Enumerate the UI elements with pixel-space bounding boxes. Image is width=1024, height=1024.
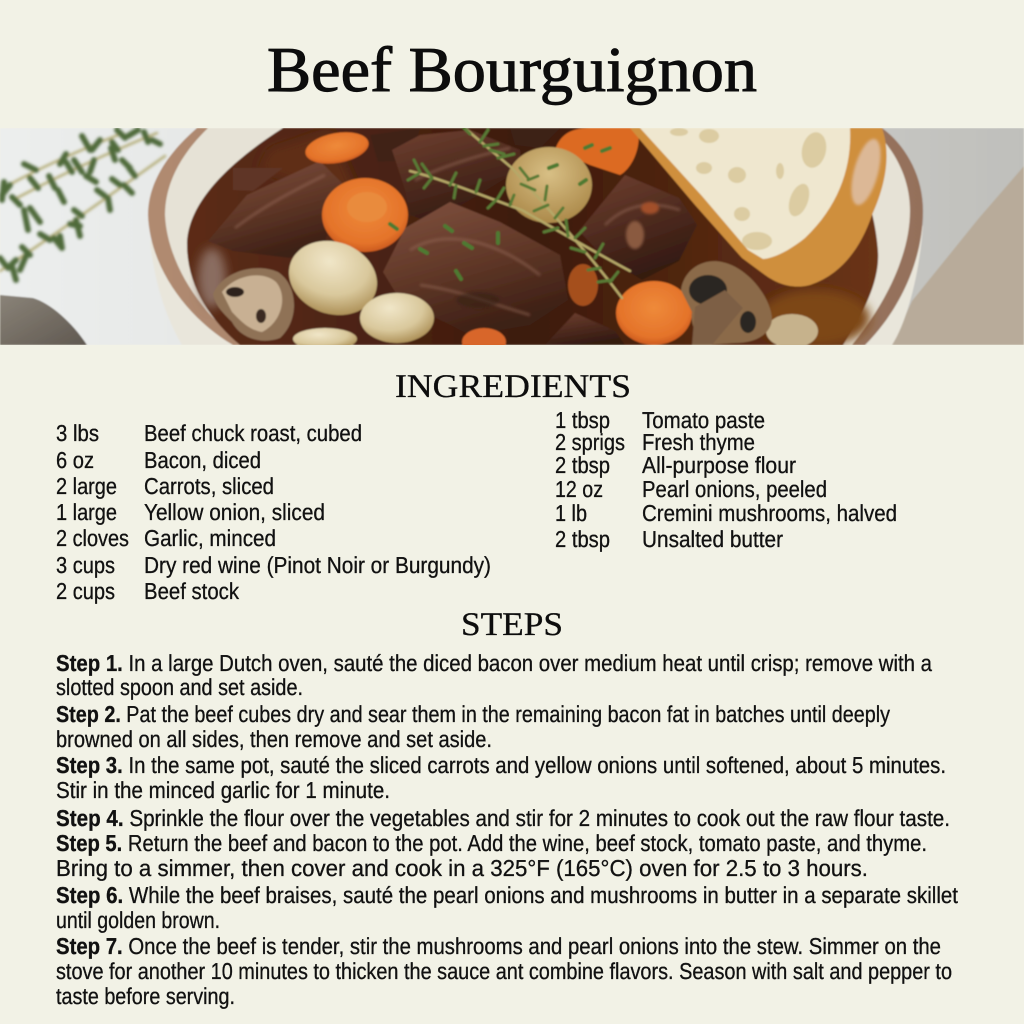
icon: spoon bbox=[0, 295, 87, 345]
ingredients list: left column: 1 large bbox=[56, 499, 117, 525]
ingredients list: left column: 6 oz bbox=[56, 447, 94, 473]
steps text block: Step 1. In a large Dutch oven, sauté the diced bacon over medium heat until crisp; remove with a bbox=[56, 650, 932, 676]
icon: linen napkin bbox=[892, 166, 1024, 345]
icon: bread slice bbox=[630, 128, 887, 287]
mushrooms bbox=[213, 261, 772, 345]
ingredients list: left column: Dry red wine (Pinot Noir or Burgundy) bbox=[144, 552, 491, 578]
title: Beef Bourguignon bbox=[267, 34, 757, 105]
steps text block: browned on all sides, then remove and set aside. bbox=[56, 726, 492, 752]
ingredients list: right column: Tomato paste bbox=[642, 407, 765, 433]
ingredients list: left column: 2 cloves bbox=[56, 525, 129, 551]
icon: thyme sprigs left bbox=[0, 130, 165, 280]
ingredients list: right column: 12 oz bbox=[555, 476, 603, 502]
ingredients list: right column: Unsalted butter bbox=[642, 526, 783, 552]
beef chunks bbox=[208, 128, 697, 345]
steps text block: until golden brown. bbox=[56, 907, 220, 933]
ingredients list: left column: 3 cups bbox=[56, 552, 115, 578]
ingredients list: right column: Fresh thyme bbox=[642, 429, 755, 455]
steps text block: Step 2. Pat the beef cubes dry and sear them in the remaining bacon fat in batches until deeply bbox=[56, 701, 890, 727]
steps text block: slotted spoon and set aside. bbox=[56, 674, 303, 700]
ingredients list: right column: 1 tbsp bbox=[555, 407, 610, 433]
ingredients list: left column: 3 lbs bbox=[56, 420, 99, 446]
steps text block bbox=[56, 650, 959, 1009]
steps text block: Step 3. In the same pot, sauté the sliced carrots and yellow onions until softened, about 5 minutes. bbox=[56, 752, 946, 778]
ingredients heading: INGREDIENTS bbox=[395, 369, 631, 405]
ingredients list: left column: 2 large bbox=[56, 473, 117, 499]
steps text block: Bring to a simmer, then cover and cook in a 325°F (165°C) oven for 2.5 to 3 hours. bbox=[56, 855, 868, 881]
ingredients list: right column: Cremini mushrooms, halved bbox=[642, 500, 897, 526]
ingredients list: right column: 2 tbsp bbox=[555, 526, 610, 552]
ingredients list: left column: Yellow onion, sliced bbox=[144, 499, 325, 525]
ingredients list: right column bbox=[555, 407, 897, 552]
pearl onions bbox=[278, 147, 818, 350]
ingredients list: left column: Beef stock bbox=[144, 578, 239, 604]
ingredients list: left column: Carrots, sliced bbox=[144, 473, 274, 499]
ingredients list: left column bbox=[56, 420, 491, 604]
photo: bowl of beef bourguignon with bread and thyme bbox=[0, 128, 1024, 356]
steps text block: Step 5. Return the beef and bacon to the pot. Add the wine, beef stock, tomato paste, and thyme. bbox=[56, 830, 927, 856]
steps heading: STEPS bbox=[461, 607, 563, 643]
ingredients list: right column: Pearl onions, peeled bbox=[642, 476, 827, 502]
icon: bowl bbox=[148, 128, 923, 346]
steps text block: taste before serving. bbox=[56, 983, 235, 1009]
ingredients list: left column: Beef chuck roast, cubed bbox=[144, 420, 362, 446]
steps text block: Step 7. Once the beef is tender, stir the mushrooms and pearl onions into the stew. Simmer on the bbox=[56, 933, 941, 959]
ingredients list: right column: 2 sprigs bbox=[555, 429, 625, 455]
ingredients list: right column: 2 tbsp bbox=[555, 452, 610, 478]
ingredients list: right column: 1 lb bbox=[555, 500, 587, 526]
ingredients list: right column: All-purpose flour bbox=[642, 452, 796, 478]
icon: thyme garnish bbox=[390, 128, 630, 298]
ingredients list: left column: 2 cups bbox=[56, 578, 115, 604]
steps text block: Step 4. Sprinkle the flour over the vegetables and stir for 2 minutes to cook out the raw flour taste. bbox=[56, 805, 950, 831]
ingredients list: left column: Bacon, diced bbox=[144, 447, 261, 473]
steps text block: Stir in the minced garlic for 1 minute. bbox=[56, 777, 390, 803]
ingredients list: left column: Garlic, minced bbox=[144, 525, 276, 551]
carrots bbox=[303, 128, 692, 356]
